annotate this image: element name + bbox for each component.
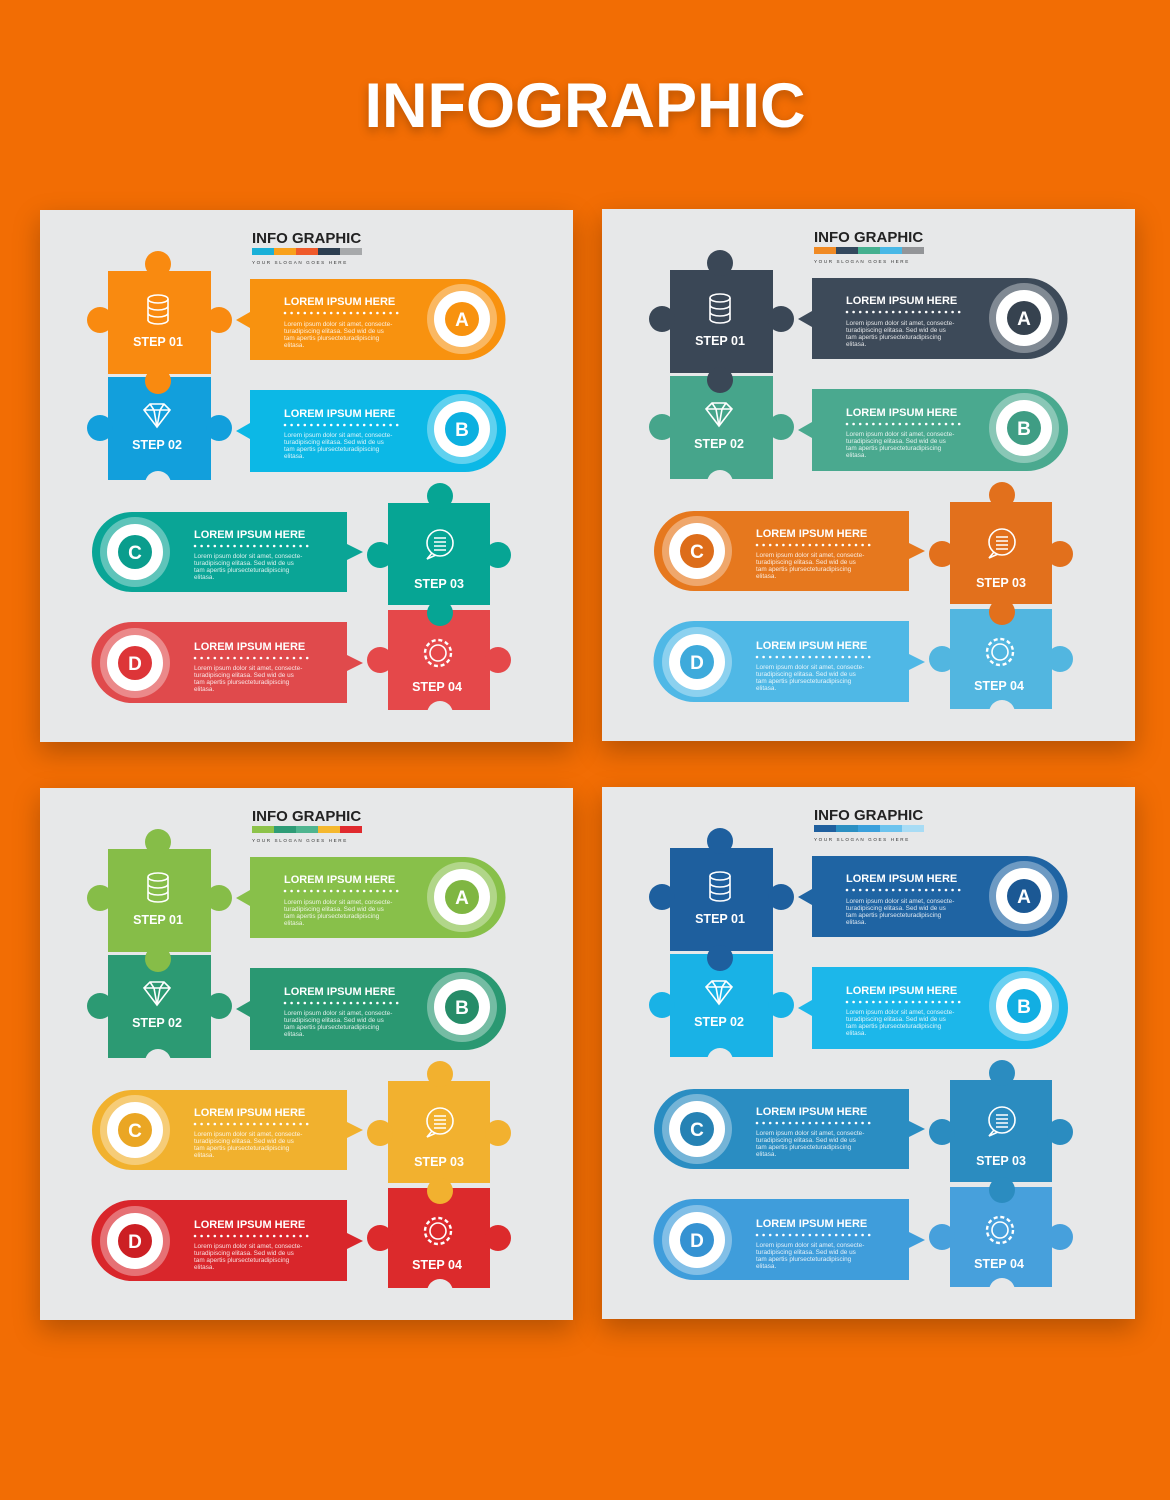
banner B: turadipiscing elitasa. Sed wid de us	[284, 1017, 384, 1024]
banner C	[654, 511, 925, 591]
header: YOUR SLOGAN GOES HERE	[252, 260, 348, 265]
banner D: Lorem ipsum dolor sit amet, consecte-	[756, 1242, 864, 1249]
step 01 piece: STEP 01	[133, 913, 183, 927]
panel: dark/green/orange/lightblue	[602, 209, 1135, 741]
banner A: Lorem ipsum dolor sit amet, consecte-	[846, 898, 954, 905]
step 01 piece: STEP 01	[695, 912, 745, 926]
banner D: elitasa.	[194, 1264, 214, 1271]
banner C: LOREM IPSUM HERE	[194, 1107, 305, 1119]
step 02 piece	[649, 954, 794, 1074]
header	[252, 230, 362, 265]
banner C	[92, 1090, 363, 1170]
banner D	[92, 622, 363, 703]
banner A: tam apertis plursecteturadipiscing	[846, 334, 942, 341]
banner B: tam apertis plursecteturadipiscing	[284, 1024, 380, 1031]
banner A	[236, 279, 505, 360]
banner D: D	[690, 1231, 704, 1252]
banner A: turadipiscing elitasa. Sed wid de us	[284, 328, 384, 335]
step 04 piece	[929, 609, 1073, 726]
header	[252, 808, 362, 843]
banner C: Lorem ipsum dolor sit amet, consecte-	[194, 553, 302, 560]
banner C: LOREM IPSUM HERE	[756, 528, 867, 540]
step 01 piece: STEP 01	[133, 335, 183, 349]
step 04 piece	[367, 1188, 511, 1305]
banner C	[92, 512, 363, 592]
title: INFOGRAPHIC	[364, 71, 806, 141]
banner B	[798, 389, 1068, 471]
banner B: B	[455, 420, 469, 441]
step 02 piece	[649, 376, 794, 496]
banner C: C	[690, 1120, 704, 1141]
banner C: C	[128, 1121, 142, 1142]
banner C: elitasa.	[756, 573, 776, 580]
header	[814, 229, 924, 264]
banner B	[236, 390, 506, 472]
step 03 piece	[367, 1061, 511, 1204]
banner A: Lorem ipsum dolor sit amet, consecte-	[284, 321, 392, 328]
header: YOUR SLOGAN GOES HERE	[252, 838, 348, 843]
banner D: tam apertis plursecteturadipiscing	[756, 678, 852, 685]
banner D: turadipiscing elitasa. Sed wid de us	[194, 672, 294, 679]
banner B: tam apertis plursecteturadipiscing	[284, 446, 380, 453]
banner C: tam apertis plursecteturadipiscing	[756, 1144, 852, 1151]
banner A: elitasa.	[846, 919, 866, 926]
step 02 piece: STEP 02	[694, 437, 744, 451]
banner B: Lorem ipsum dolor sit amet, consecte-	[846, 431, 954, 438]
banner D: Lorem ipsum dolor sit amet, consecte-	[194, 665, 302, 672]
banner C: elitasa.	[194, 1152, 214, 1159]
panel: green/teal/yellow/red	[40, 788, 573, 1320]
banner C: turadipiscing elitasa. Sed wid de us	[194, 1138, 294, 1145]
banner B: elitasa.	[284, 453, 304, 460]
banner A: tam apertis plursecteturadipiscing	[284, 913, 380, 920]
step 02 piece: STEP 02	[132, 438, 182, 452]
banner A	[798, 278, 1067, 359]
banner A: A	[1017, 309, 1031, 330]
banner B: LOREM IPSUM HERE	[284, 986, 395, 998]
step 04 piece	[367, 610, 511, 727]
step 03 piece: STEP 03	[414, 1155, 464, 1169]
banner C: turadipiscing elitasa. Sed wid de us	[756, 1137, 856, 1144]
banner A: LOREM IPSUM HERE	[846, 295, 957, 307]
banner C: LOREM IPSUM HERE	[756, 1106, 867, 1118]
banner B: B	[455, 998, 469, 1019]
banner D: LOREM IPSUM HERE	[756, 1218, 867, 1230]
banner D: elitasa.	[194, 686, 214, 693]
step 04 piece: STEP 04	[974, 1257, 1024, 1271]
banner A: LOREM IPSUM HERE	[846, 873, 957, 885]
banner A: A	[455, 888, 469, 909]
banner A: elitasa.	[284, 920, 304, 927]
header: INFO GRAPHIC	[814, 229, 923, 246]
banner A: tam apertis plursecteturadipiscing	[284, 335, 380, 342]
step 03 piece	[367, 483, 511, 626]
panel: blues	[602, 787, 1135, 1319]
banner B: elitasa.	[846, 1030, 866, 1037]
banner A: Lorem ipsum dolor sit amet, consecte-	[284, 899, 392, 906]
banner D: D	[690, 653, 704, 674]
banner D: D	[128, 1232, 142, 1253]
banner C: C	[690, 542, 704, 563]
banner B: B	[1017, 997, 1031, 1018]
header: INFO GRAPHIC	[252, 230, 361, 247]
banner C: LOREM IPSUM HERE	[194, 529, 305, 541]
banner B: turadipiscing elitasa. Sed wid de us	[846, 1016, 946, 1023]
step 04 piece	[929, 1187, 1073, 1304]
banner D: elitasa.	[756, 1263, 776, 1270]
banner C	[654, 1089, 925, 1169]
banner C: tam apertis plursecteturadipiscing	[756, 566, 852, 573]
banner B: LOREM IPSUM HERE	[846, 985, 957, 997]
banner B: elitasa.	[284, 1031, 304, 1038]
banner D: LOREM IPSUM HERE	[194, 1219, 305, 1231]
banner A: elitasa.	[846, 341, 866, 348]
banner A: elitasa.	[284, 342, 304, 349]
panel: orange/blue/teal/red	[40, 210, 573, 742]
banner D: Lorem ipsum dolor sit amet, consecte-	[756, 664, 864, 671]
header: INFO GRAPHIC	[814, 807, 923, 824]
banner C: C	[128, 543, 142, 564]
banner A: LOREM IPSUM HERE	[284, 874, 395, 886]
step 03 piece	[929, 482, 1073, 625]
banner B: tam apertis plursecteturadipiscing	[846, 445, 942, 452]
step 01 piece	[649, 828, 794, 971]
banner D	[654, 621, 925, 702]
banner B: Lorem ipsum dolor sit amet, consecte-	[284, 432, 392, 439]
header: YOUR SLOGAN GOES HERE	[814, 837, 910, 842]
banner C: turadipiscing elitasa. Sed wid de us	[756, 559, 856, 566]
banner A: LOREM IPSUM HERE	[284, 296, 395, 308]
banner A	[798, 856, 1067, 937]
banner D: tam apertis plursecteturadipiscing	[194, 679, 290, 686]
banner C: Lorem ipsum dolor sit amet, consecte-	[756, 1130, 864, 1137]
step 03 piece	[929, 1060, 1073, 1203]
banner B: turadipiscing elitasa. Sed wid de us	[846, 438, 946, 445]
header: INFO GRAPHIC	[252, 808, 361, 825]
banner D: LOREM IPSUM HERE	[756, 640, 867, 652]
banner B: tam apertis plursecteturadipiscing	[846, 1023, 942, 1030]
banner A	[236, 857, 505, 938]
step 04 piece: STEP 04	[412, 680, 462, 694]
banner A: turadipiscing elitasa. Sed wid de us	[846, 327, 946, 334]
banner A: turadipiscing elitasa. Sed wid de us	[846, 905, 946, 912]
banner D: LOREM IPSUM HERE	[194, 641, 305, 653]
banner A: tam apertis plursecteturadipiscing	[846, 912, 942, 919]
step 03 piece: STEP 03	[414, 577, 464, 591]
banner B	[236, 968, 506, 1050]
banner D: turadipiscing elitasa. Sed wid de us	[756, 1249, 856, 1256]
banner C: elitasa.	[194, 574, 214, 581]
banner B: elitasa.	[846, 452, 866, 459]
step 01 piece	[87, 251, 232, 394]
banner B: LOREM IPSUM HERE	[846, 407, 957, 419]
banner D: elitasa.	[756, 685, 776, 692]
banner C: tam apertis plursecteturadipiscing	[194, 1145, 290, 1152]
step 01 piece	[87, 829, 232, 972]
step 02 piece	[87, 955, 232, 1075]
header	[814, 807, 924, 842]
banner D: D	[128, 654, 142, 675]
step 02 piece	[87, 377, 232, 497]
banner A: A	[455, 310, 469, 331]
banner D: turadipiscing elitasa. Sed wid de us	[194, 1250, 294, 1257]
banner A: Lorem ipsum dolor sit amet, consecte-	[846, 320, 954, 327]
banner D: tam apertis plursecteturadipiscing	[194, 1257, 290, 1264]
banner B: Lorem ipsum dolor sit amet, consecte-	[284, 1010, 392, 1017]
step 03 piece: STEP 03	[976, 576, 1026, 590]
banner B: Lorem ipsum dolor sit amet, consecte-	[846, 1009, 954, 1016]
step 01 piece	[649, 250, 794, 393]
header: YOUR SLOGAN GOES HERE	[814, 259, 910, 264]
banner D: Lorem ipsum dolor sit amet, consecte-	[194, 1243, 302, 1250]
banner D	[92, 1200, 363, 1281]
banner D: turadipiscing elitasa. Sed wid de us	[756, 671, 856, 678]
banner B: LOREM IPSUM HERE	[284, 408, 395, 420]
step 04 piece: STEP 04	[412, 1258, 462, 1272]
banner B: B	[1017, 419, 1031, 440]
step 02 piece: STEP 02	[132, 1016, 182, 1030]
banner D: tam apertis plursecteturadipiscing	[756, 1256, 852, 1263]
banner C: turadipiscing elitasa. Sed wid de us	[194, 560, 294, 567]
step 04 piece: STEP 04	[974, 679, 1024, 693]
banner B	[798, 967, 1068, 1049]
banner A: A	[1017, 887, 1031, 908]
banner C: Lorem ipsum dolor sit amet, consecte-	[756, 552, 864, 559]
step 03 piece: STEP 03	[976, 1154, 1026, 1168]
banner C: elitasa.	[756, 1151, 776, 1158]
step 02 piece: STEP 02	[694, 1015, 744, 1029]
banner C: tam apertis plursecteturadipiscing	[194, 567, 290, 574]
banner B: turadipiscing elitasa. Sed wid de us	[284, 439, 384, 446]
banner C: Lorem ipsum dolor sit amet, consecte-	[194, 1131, 302, 1138]
banner A: turadipiscing elitasa. Sed wid de us	[284, 906, 384, 913]
banner D	[654, 1199, 925, 1280]
step 01 piece: STEP 01	[695, 334, 745, 348]
